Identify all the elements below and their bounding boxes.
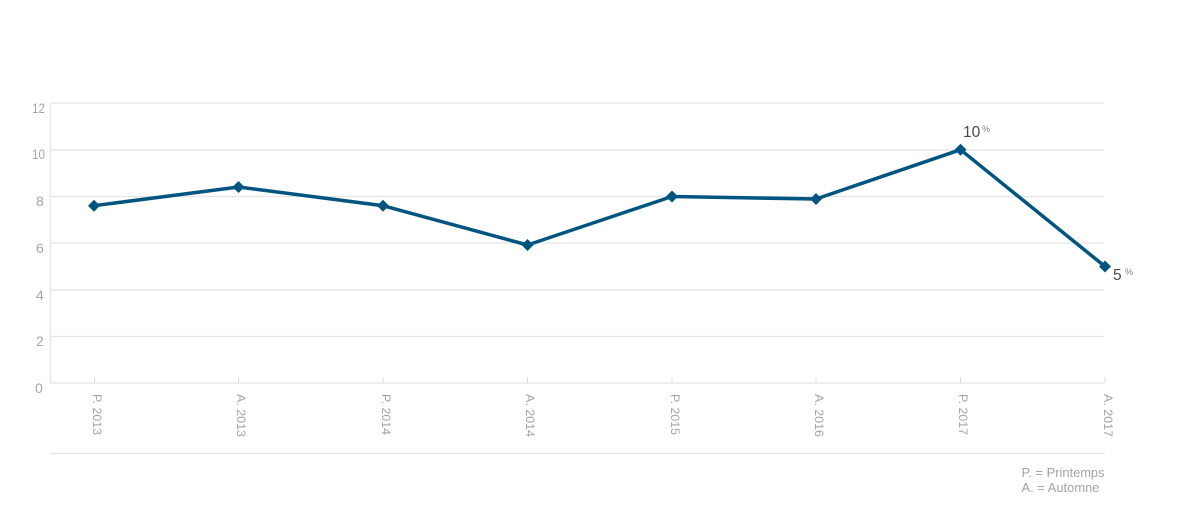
x axis labels: A. 2013 — [234, 394, 248, 437]
y axis labels: 0 — [35, 380, 43, 396]
y axis labels: 4 — [36, 287, 44, 303]
x axis labels: P. 2014 — [379, 394, 393, 435]
data series line — [94, 150, 1105, 266]
x axis labels: P. 2013 — [90, 394, 104, 435]
legend note: A. = Automne — [1022, 481, 1100, 495]
value label: 5 %: 5 — [1113, 267, 1122, 284]
x axis labels: P. 2017 — [956, 394, 970, 435]
y axis labels: 10 — [32, 146, 45, 162]
y axis labels — [32, 100, 45, 396]
x axis labels — [90, 394, 1115, 437]
x axis labels: A. 2014 — [523, 394, 537, 437]
value label: 5 % — [1113, 267, 1133, 284]
x axis labels: P. 2015 — [668, 394, 682, 435]
y axis labels: 8 — [36, 193, 44, 209]
y axis labels: 6 — [36, 240, 44, 256]
data point markers — [88, 144, 1111, 272]
y axis labels: 2 — [36, 333, 44, 349]
value label: 10 %: % — [982, 124, 990, 134]
x axis labels: A. 2017 — [1101, 394, 1115, 437]
value label: 10 % — [963, 124, 990, 141]
x axis labels: A. 2016 — [812, 394, 826, 437]
legend note — [1022, 466, 1104, 495]
y axis labels: 12 — [32, 100, 45, 116]
value label: 5 %: % — [1125, 267, 1133, 277]
legend note: P. = Printemps — [1022, 466, 1104, 480]
value label: 10 %: 10 — [963, 124, 981, 141]
